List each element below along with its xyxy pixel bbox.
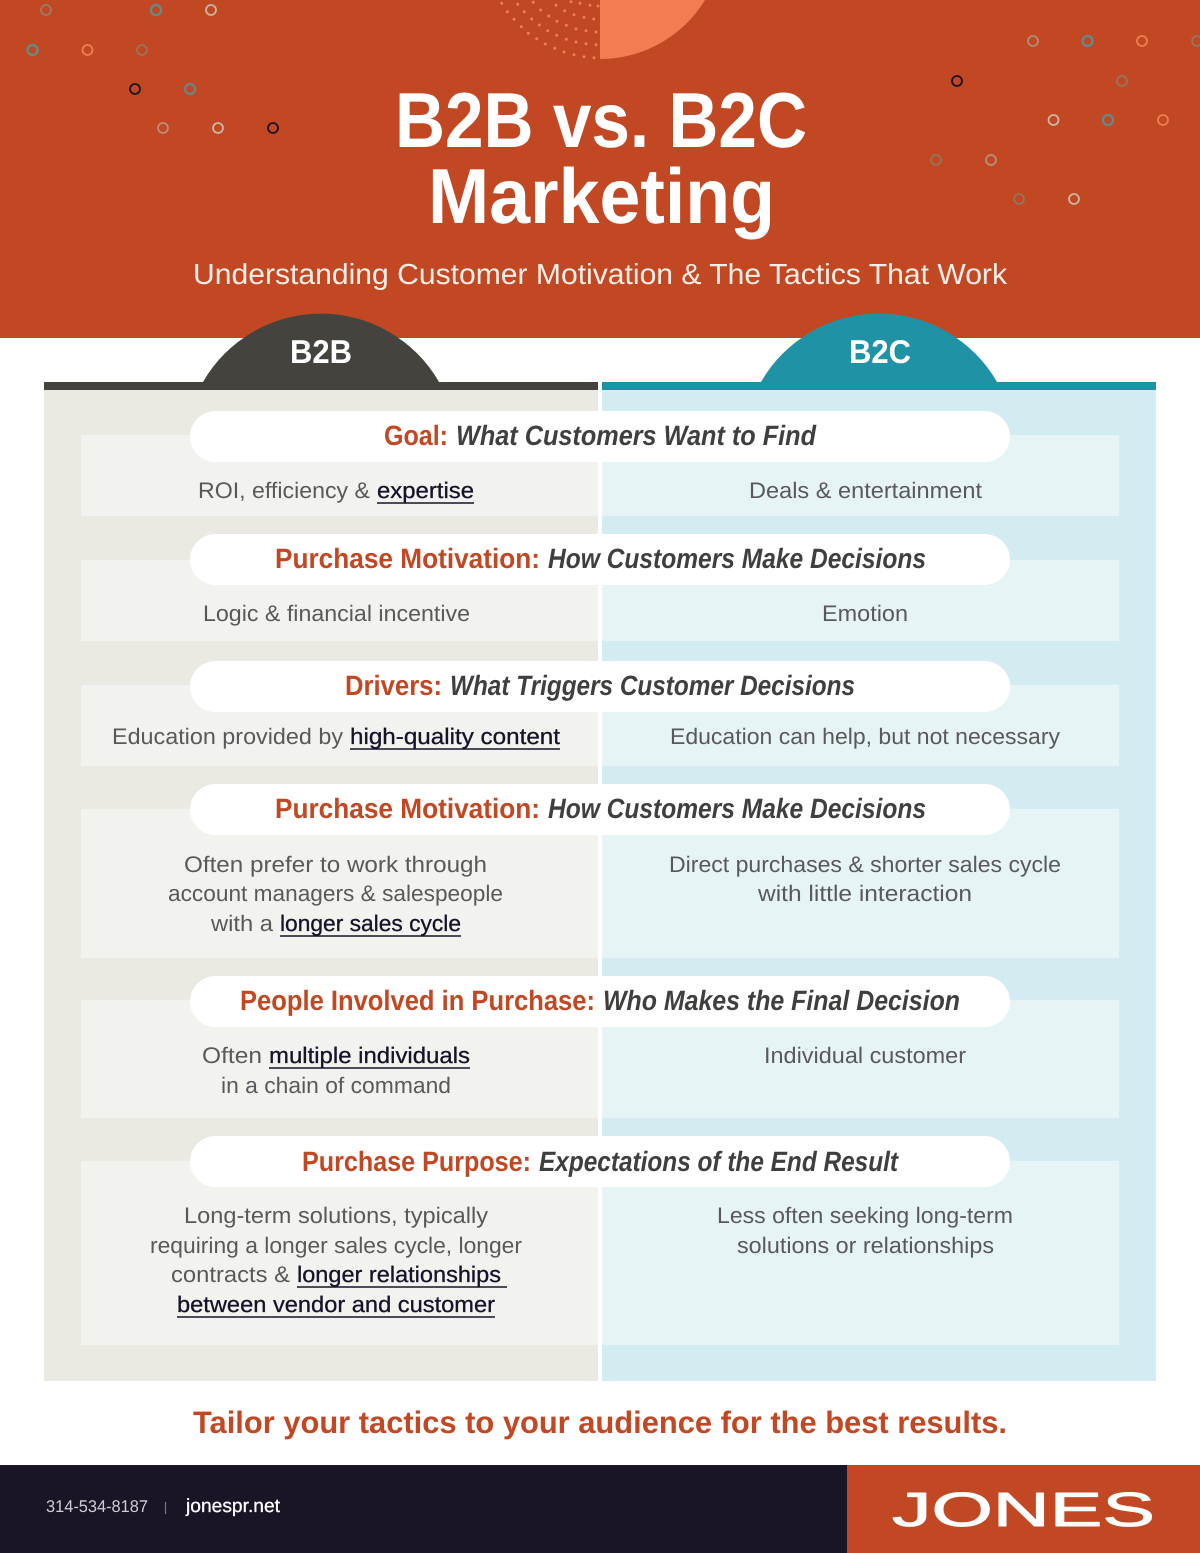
row: purchase purpose: Less often seeking long-term [717,1203,1013,1228]
title [395,76,807,240]
dotted half circle [500,0,600,59]
panel: B2C column [602,314,1156,1381]
row: purchase purpose: Long-term solutions, typically [184,1203,489,1228]
panel: B2C column: B2C [849,333,911,370]
row: purchase purpose [81,1136,1119,1345]
row: purchase purpose: contracts & [171,1262,290,1287]
row: purchase motivation: Emotion [822,601,908,626]
row: drivers: Education provided by [112,724,344,749]
row: purchase motivation, sales cycle: Direct purchases & shorter sales cycle [669,852,1061,877]
footer [0,1465,1200,1553]
row: people involved: Often [202,1043,262,1068]
decorative rings: left [28,5,278,133]
row: purchase motivation: Purchase Motivation: [275,543,540,574]
row: drivers [81,661,1119,766]
call to action: Tailor your tactics to your audience for the best results. [193,1405,1007,1440]
row: purchase motivation, sales cycle: with a [210,911,274,936]
row: purchase motivation, sales cycle: Often prefer to work through [184,852,487,877]
row: purchase motivation, sales cycle: longer sales cycle [280,911,461,936]
row: drivers: Education can help, but not necessary [670,724,1061,749]
row: purchase purpose: requiring a longer sales cycle, longer [150,1233,523,1258]
row: purchase motivation: How Customers Make Decisions [548,543,926,574]
row: people involved: in a chain of command [221,1073,451,1098]
row: purchase motivation, sales cycle [81,784,1119,958]
logo: JONES: JONES [892,1484,1155,1537]
row: drivers: high-quality content [350,724,561,749]
decorative rings: right [931,36,1200,204]
row: people involved: multiple individuals [269,1043,470,1068]
row: purchase purpose: longer relationships [297,1262,501,1287]
panel: B2B column [44,314,598,1381]
row: purchase motivation, sales cycle: with little interaction [757,881,972,906]
row: people involved: Who Makes the Final Decision [603,985,960,1016]
row: purchase motivation, sales cycle: account managers & salespeople [168,881,503,906]
row: goal: What Customers Want to Find [456,420,817,451]
row: purchase motivation, sales cycle: Purchase Motivation: [275,793,540,824]
row: drivers: Drivers: [345,670,442,701]
title: Marketing [428,152,775,240]
row: drivers: What Triggers Customer Decisions [450,670,855,701]
row: goal: expertise [377,478,474,503]
row: purchase purpose: solutions or relationships [737,1233,994,1258]
row: people involved: People Involved in Purchase: [240,985,595,1016]
row: goal: Deals & entertainment [749,478,983,503]
subtitle: Understanding Customer Motivation & The Tactics That Work [193,259,1008,291]
header banner [0,0,1200,338]
phone number: 314-534-8187 [46,1497,148,1516]
row: purchase purpose: between vendor and customer [177,1292,496,1317]
row: people involved: Individual customer [764,1043,967,1068]
row: purchase motivation: Logic & financial incentive [203,601,470,626]
title: B2B vs. B2C [395,76,807,164]
row: purchase motivation [81,534,1119,641]
row: goal: Goal: [384,420,448,451]
row: goal [81,411,1119,516]
row: purchase purpose: Purchase Purpose: [302,1146,531,1177]
row: people involved [81,976,1119,1118]
icon: half circle [600,0,705,59]
row: purchase motivation, sales cycle: How Customers Make Decisions [548,793,926,824]
panel: B2B column: B2B [290,333,352,370]
website: jonespr.net [185,1496,281,1517]
row: goal: ROI, efficiency & [198,478,370,503]
row: purchase purpose: Expectations of the End Result [539,1146,899,1177]
